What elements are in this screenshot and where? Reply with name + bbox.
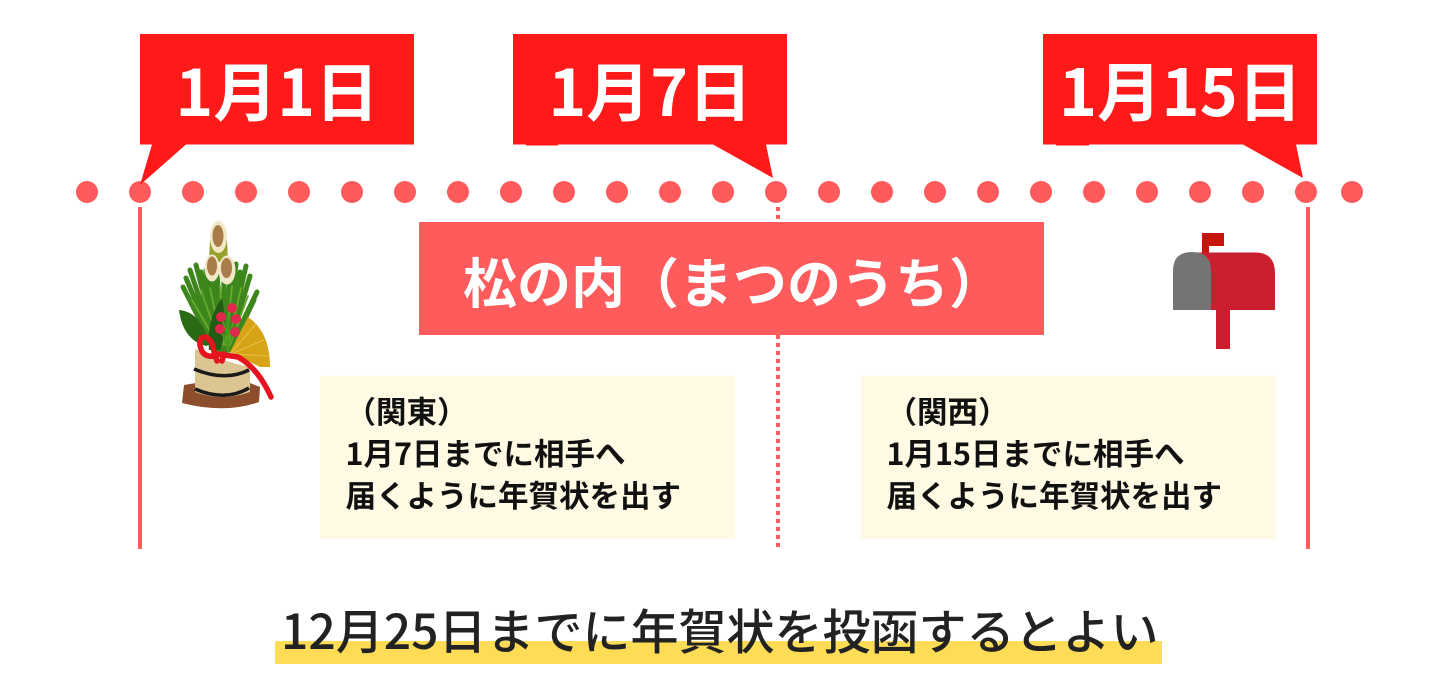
callout: January 15: 1月15日 bbox=[1059, 41, 1302, 135]
note: Kanto bbox=[320, 376, 735, 539]
note: Kansai: 1月15日までに相手へ bbox=[886, 430, 1184, 474]
vertical line: January 15 bbox=[1306, 207, 1310, 549]
note: Kansai: 届くように年賀状を出す bbox=[886, 472, 1222, 516]
note: Kanto: 届くように年賀状を出す bbox=[346, 472, 681, 516]
note: Kanto: （関東） bbox=[346, 388, 468, 432]
callout: January 1 bbox=[140, 34, 414, 185]
banner: matsu no uchi: 松の内（まつのうち） bbox=[463, 240, 1003, 319]
vertical line: January 1 bbox=[138, 207, 142, 549]
base bbox=[182, 383, 260, 408]
callout: January 7 bbox=[513, 34, 787, 178]
note: Kansai: （関西） bbox=[886, 388, 1008, 432]
banner: matsu no uchi bbox=[419, 222, 1044, 335]
callout: January 15 bbox=[1043, 34, 1317, 178]
pine needles bbox=[183, 264, 257, 350]
bamboo bbox=[209, 240, 228, 262]
fan bbox=[230, 317, 270, 367]
icon: kadomatsu bbox=[179, 221, 271, 408]
bamboo lower stalks bbox=[204, 254, 220, 282]
note: Kansai bbox=[861, 376, 1276, 539]
ribbon bbox=[200, 337, 271, 397]
barrel bbox=[195, 349, 250, 397]
callout: January 7: 1月7日 bbox=[548, 43, 752, 135]
vertical dotted line: January 7 bbox=[776, 207, 780, 549]
icon: mailbox bbox=[1173, 233, 1275, 349]
note: Kanto: 1月7日までに相手へ bbox=[346, 430, 626, 474]
dotted timeline bbox=[76, 181, 1363, 203]
callout: January 1: 1月1日 bbox=[176, 43, 379, 135]
highlighted conclusion: 12月25日までに年賀状を投函するとよい bbox=[281, 593, 1158, 663]
leaves bbox=[179, 310, 209, 346]
berries bbox=[220, 315, 236, 352]
